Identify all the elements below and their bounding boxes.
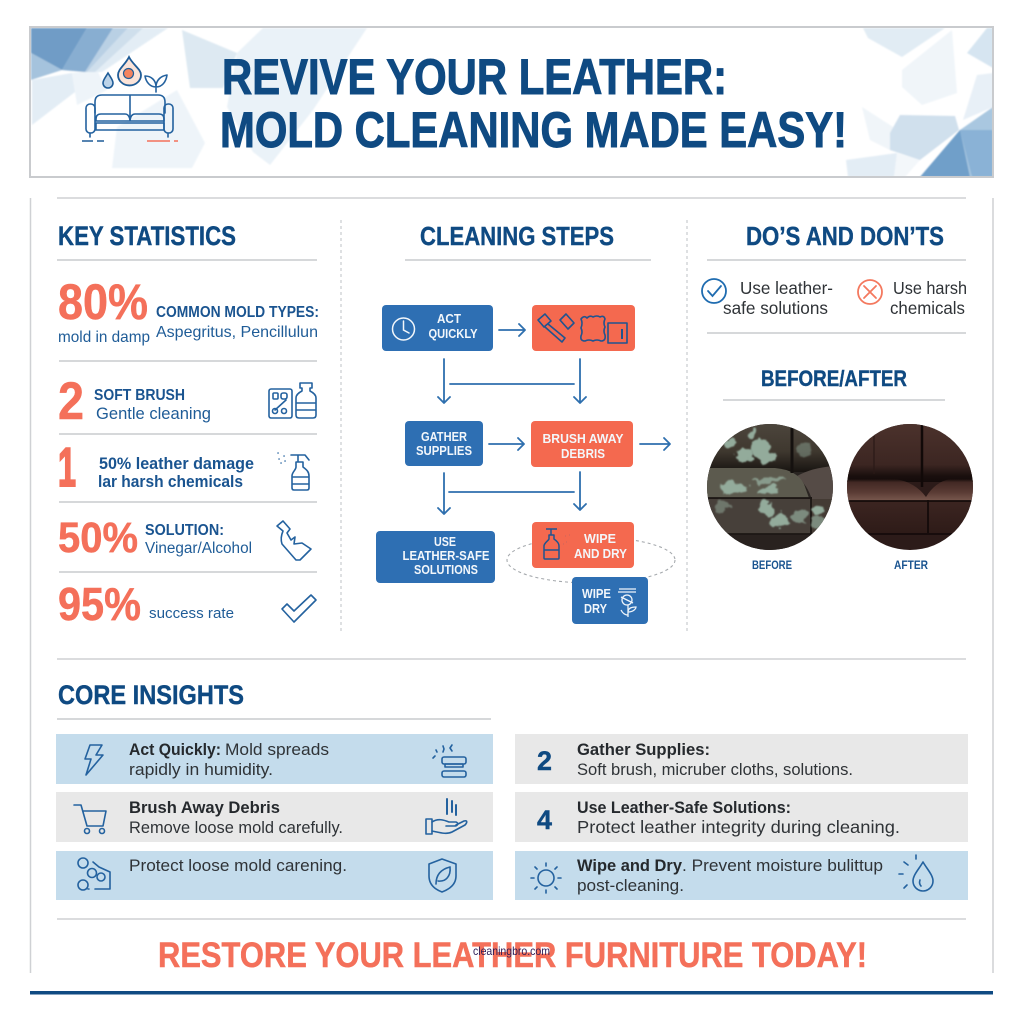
insight: gather supplies: 2 <box>537 746 552 776</box>
stat: 1 leather damage: 50% leather damage <box>99 455 254 473</box>
stat: 80% mold in damp <box>58 274 319 346</box>
icon: shield with leaf <box>429 859 456 892</box>
panel: core insights <box>56 680 968 900</box>
arrows: middle row down <box>438 472 586 514</box>
step: wipe dry: WIPE <box>582 586 611 601</box>
step: brush away debris: BRUSH AWAY <box>542 431 624 446</box>
stat: 80% mold in damp: Aspegritus, Pencillulun <box>156 324 318 341</box>
insight: wipe and dry: post-cleaning. <box>577 876 684 895</box>
icon: hand holding bottles <box>426 799 467 834</box>
heading: do's and don'ts: DO’S AND DON’TS <box>746 221 944 251</box>
connector ellipse <box>507 537 675 583</box>
title <box>220 49 847 158</box>
insight: act quickly <box>56 734 493 784</box>
panel: do's and don'ts <box>700 221 980 572</box>
insight: use leather-safe solutions: 4 <box>537 805 552 835</box>
header banner <box>30 27 993 177</box>
insight: brush away debris: Brush Away Debris <box>129 798 280 817</box>
step: use leather-safe solutions: USE <box>434 534 456 549</box>
insight: gather supplies: Soft brush, micruber cloths, solutions. <box>577 760 853 779</box>
stat: 2 soft brush: 2 <box>58 372 84 431</box>
stat: 1 leather damage: 1 <box>58 436 76 498</box>
arrow <box>640 438 670 450</box>
insight: wipe and dry: . Prevent moisture bulittup <box>682 856 883 875</box>
step: wipe and dry: WIPE <box>584 531 616 546</box>
insight: protect loose mold: Protect loose mold carening. <box>129 856 347 875</box>
do: use leather-safe solutions: safe solutions <box>723 298 828 318</box>
stat: 2 soft brush: Gentle cleaning <box>96 404 211 423</box>
title: REVIVE YOUR LEATHER: <box>222 49 727 105</box>
arrow <box>489 438 524 450</box>
photo: after, clean sofa <box>847 424 973 550</box>
footer rule <box>30 991 993 994</box>
insight: act quickly: rapidly in humidity. <box>129 760 273 779</box>
heading: core insights: CORE INSIGHTS <box>58 680 244 710</box>
stat: 80% mold in damp: 80% <box>58 274 148 330</box>
stat: 2 soft brush: SOFT BRUSH <box>94 387 185 404</box>
icon: brush with sparkles <box>433 745 466 777</box>
insight: wipe and dry: Wipe and Dry <box>577 856 683 875</box>
footer call to action: RESTORE YOUR LEATHER FURNITURE TODAY! <box>158 936 867 975</box>
stat: 50% solution <box>58 514 311 562</box>
don't: use harsh chemicals <box>858 278 967 318</box>
watermark: cleaningbro.com <box>473 944 550 958</box>
icon: tilted bottle <box>277 521 311 560</box>
step: gather supplies: SUPPLIES <box>416 443 472 458</box>
panel: cleaning steps <box>376 221 675 624</box>
don't: use harsh chemicals: Use harsh <box>893 278 967 298</box>
stat: 95% success rate <box>58 578 316 630</box>
insight: brush away debris <box>56 792 493 842</box>
icon: spray bottle <box>278 453 309 490</box>
insight: act quickly: Mold spreads <box>225 740 329 759</box>
icon: sofa with drops and leaf <box>82 57 178 141</box>
step: act quickly: QUICKLY <box>428 326 478 341</box>
insight: wipe and dry <box>515 851 968 900</box>
panel: key statistics <box>57 221 319 630</box>
insight: use leather-safe solutions: Use Leather-Safe Solutions: <box>577 798 791 817</box>
insight: protect loose mold <box>56 851 493 900</box>
insight: use leather-safe solutions: Protect leather integrity during cleaning. <box>577 817 900 837</box>
stat: 80% mold in damp: COMMON MOLD TYPES: <box>156 304 319 321</box>
photo: before, moldy sofa <box>707 424 833 550</box>
heading: before/after: BEFORE/AFTER <box>761 366 907 391</box>
step: use leather-safe solutions <box>376 531 495 583</box>
do: use leather-safe solutions <box>702 278 833 318</box>
icon: check mark <box>282 595 316 622</box>
insight: brush away debris: Remove loose mold carefully. <box>129 818 343 837</box>
label: before: BEFORE <box>752 560 792 572</box>
icon: water drop with sparks <box>899 855 933 891</box>
step: wipe and dry: AND DRY <box>574 546 627 561</box>
arrow <box>499 324 525 336</box>
don't: use harsh chemicals: chemicals <box>890 298 965 318</box>
title: MOLD CLEANING MADE EASY! <box>220 102 847 158</box>
step: use leather-safe solutions: LEATHER-SAFE <box>402 548 490 563</box>
arrows: top row down <box>438 359 586 403</box>
label: after: AFTER <box>894 560 929 572</box>
step: brush away debris <box>531 421 633 467</box>
step: use leather-safe solutions: SOLUTIONS <box>414 562 478 577</box>
icon: brush board and bottle <box>269 383 316 418</box>
step: tools icon box <box>532 305 635 351</box>
stat: 1 leather damage: lar harsh chemicals <box>98 473 243 491</box>
stat: 50% solution: SOLUTION: <box>145 522 224 539</box>
heading: key statistics: KEY STATISTICS <box>58 221 236 251</box>
insight: gather supplies: Gather Supplies: <box>577 740 710 759</box>
insight: gather supplies <box>515 734 968 784</box>
stat: 95% success rate: success rate <box>149 605 234 622</box>
stat: 95% success rate: 95% <box>58 578 141 630</box>
insight: use leather-safe solutions <box>515 792 968 842</box>
insight: act quickly: Act Quickly: <box>129 740 221 759</box>
step: gather supplies: GATHER <box>421 429 468 444</box>
step: act quickly <box>382 305 493 351</box>
stat: 50% solution: 50% <box>58 514 138 562</box>
step: brush away debris: DEBRIS <box>561 446 605 461</box>
step: wipe dry: DRY <box>584 601 607 616</box>
step: wipe and dry <box>532 522 634 568</box>
step: gather supplies <box>405 421 483 466</box>
stat: 80% mold in damp: mold in damp <box>58 329 150 346</box>
stat: 2 soft brush <box>58 372 316 431</box>
stat: 50% solution: Vinegar/Alcohol <box>145 540 252 557</box>
heading: cleaning steps: CLEANING STEPS <box>420 221 614 251</box>
stat: 1 leather damage <box>58 436 309 498</box>
step: wipe dry <box>572 577 648 624</box>
do: use leather-safe solutions: Use leather- <box>740 278 833 298</box>
step: act quickly: ACT <box>437 311 461 326</box>
